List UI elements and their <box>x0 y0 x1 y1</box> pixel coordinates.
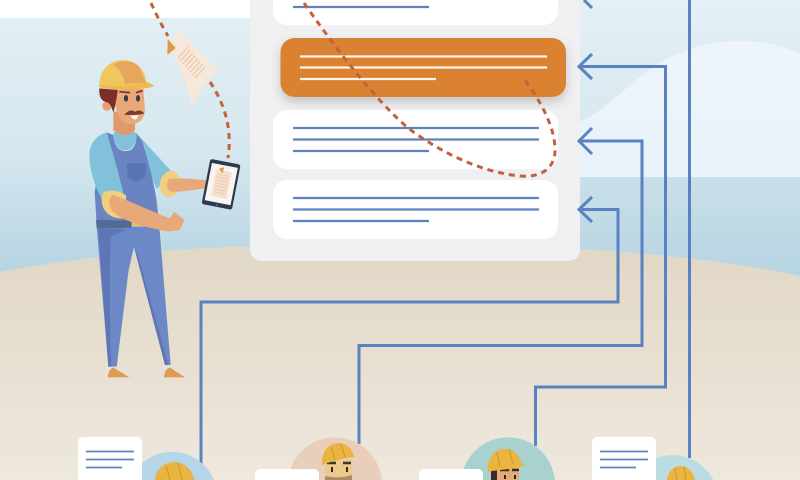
hat <box>155 462 195 480</box>
route across the cards <box>304 3 555 176</box>
panel: document list <box>250 0 580 261</box>
dashed route to paper <box>151 3 168 36</box>
hat <box>488 449 525 472</box>
icon: flying paper <box>167 31 218 107</box>
ground <box>0 244 800 480</box>
buckle <box>132 221 142 226</box>
legs <box>97 227 171 367</box>
connector arrows <box>201 0 690 464</box>
belt <box>96 220 150 228</box>
background sky <box>0 0 800 280</box>
card 1 <box>273 0 558 25</box>
note card 2 <box>255 469 319 480</box>
worker avatar 4 <box>633 455 713 480</box>
right sleeve <box>137 133 172 189</box>
worker avatar 3 <box>461 437 555 480</box>
collar <box>113 132 137 150</box>
vertical connector <box>688 0 691 458</box>
top white banner <box>0 0 250 18</box>
dashed route from tablet <box>210 82 229 158</box>
arrow to card 1 <box>584 0 592 8</box>
left sleeve <box>89 132 123 199</box>
worker avatar 2 <box>288 437 382 480</box>
hard hat <box>99 60 154 90</box>
background sea band <box>580 177 800 277</box>
note card 1 <box>78 437 142 480</box>
note card 3 <box>419 469 483 480</box>
card 2 highlighted <box>280 38 566 97</box>
card 4 <box>273 180 558 239</box>
arrow to card 2 <box>536 54 666 446</box>
arrow to card 3 <box>359 128 642 444</box>
card 3 <box>273 110 558 169</box>
note card 4 <box>592 437 656 480</box>
background hill <box>580 41 800 178</box>
worker avatar 1 <box>130 452 214 480</box>
overalls bib <box>95 132 159 225</box>
neck and head <box>99 88 145 135</box>
tablet <box>202 159 241 210</box>
face <box>325 460 352 480</box>
shoes <box>108 368 185 377</box>
face <box>493 468 519 480</box>
hat <box>322 443 355 465</box>
right arm <box>157 169 207 199</box>
left arm <box>102 191 184 232</box>
pocket <box>127 163 147 182</box>
hat <box>667 466 695 480</box>
illustration: worker <box>89 60 241 377</box>
arrow to card 4 <box>201 197 618 464</box>
